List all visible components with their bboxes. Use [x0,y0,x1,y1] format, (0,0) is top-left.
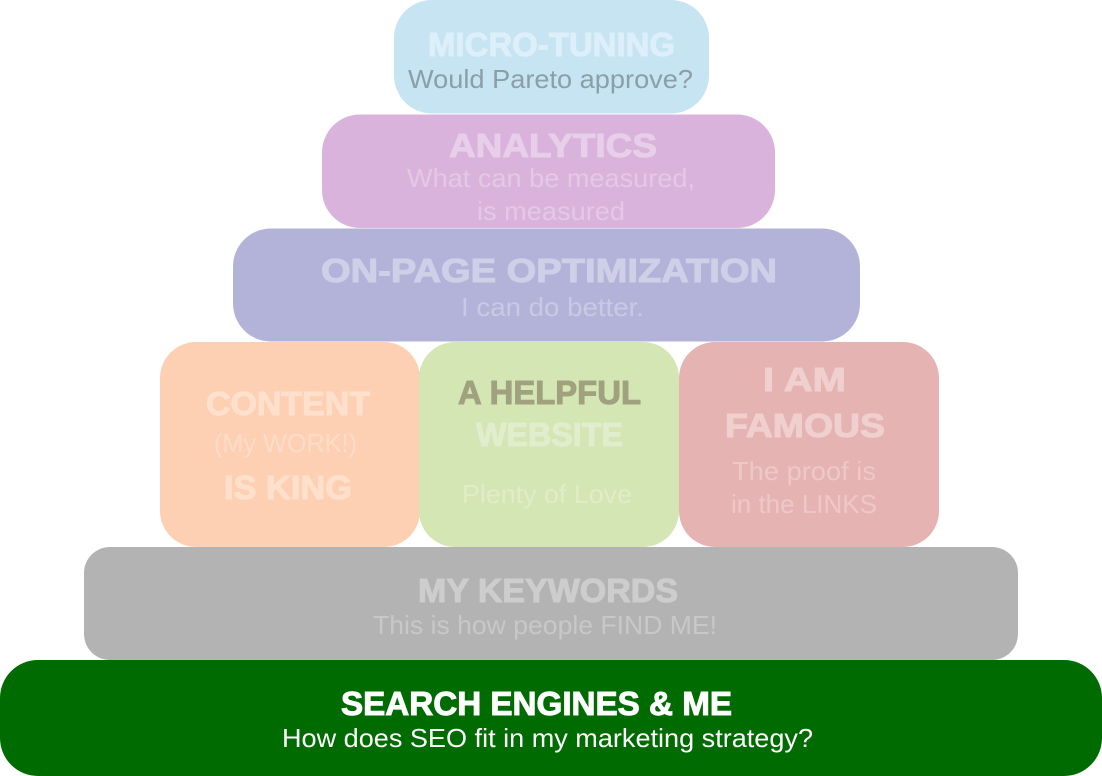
panel: micro-tuning [394,0,709,114]
text: plenty of love: Plenty of Love [462,479,632,509]
text: how does SEO fit: How does SEO fit in my marketing strategy? [282,723,813,753]
panel: analytics [322,114,775,228]
text: I can do better: I can do better. [461,292,644,322]
panel: search engines and me [0,660,1102,776]
heading: is king: IS KING [224,469,352,506]
heading: I am: I AM [763,361,846,398]
text: my work: (My WORK!) [214,428,357,458]
panel: on-page optimization [233,228,860,342]
text: what can be measured: What can be measured, [407,163,695,193]
panel: a helpful website [419,342,679,547]
heading: my keywords: MY KEYWORDS [418,572,678,609]
text: is measured: is measured [477,196,625,226]
heading: website: WEBSITE [476,416,623,453]
heading: on-page optimization: ON-PAGE OPTIMIZATION [321,252,777,289]
heading: search engines and me: SEARCH ENGINES & ME [341,685,732,722]
heading: content: CONTENT [206,385,370,422]
panel: my keywords [84,547,1018,660]
text: would Pareto approve: Would Pareto approve? [408,64,693,94]
heading: analytics: ANALYTICS [449,127,657,164]
heading: a helpful: A HELPFUL [458,374,641,411]
panel: content is king [160,342,420,547]
text: the proof is: The proof is [732,456,876,486]
heading: micro-tuning: MICRO-TUNING [428,26,675,63]
text: in the links: in the LINKS [731,489,877,519]
panel: I am famous [679,342,939,547]
text: this is how people find me: This is how people FIND ME! [373,610,717,640]
heading: famous: FAMOUS [725,407,885,444]
